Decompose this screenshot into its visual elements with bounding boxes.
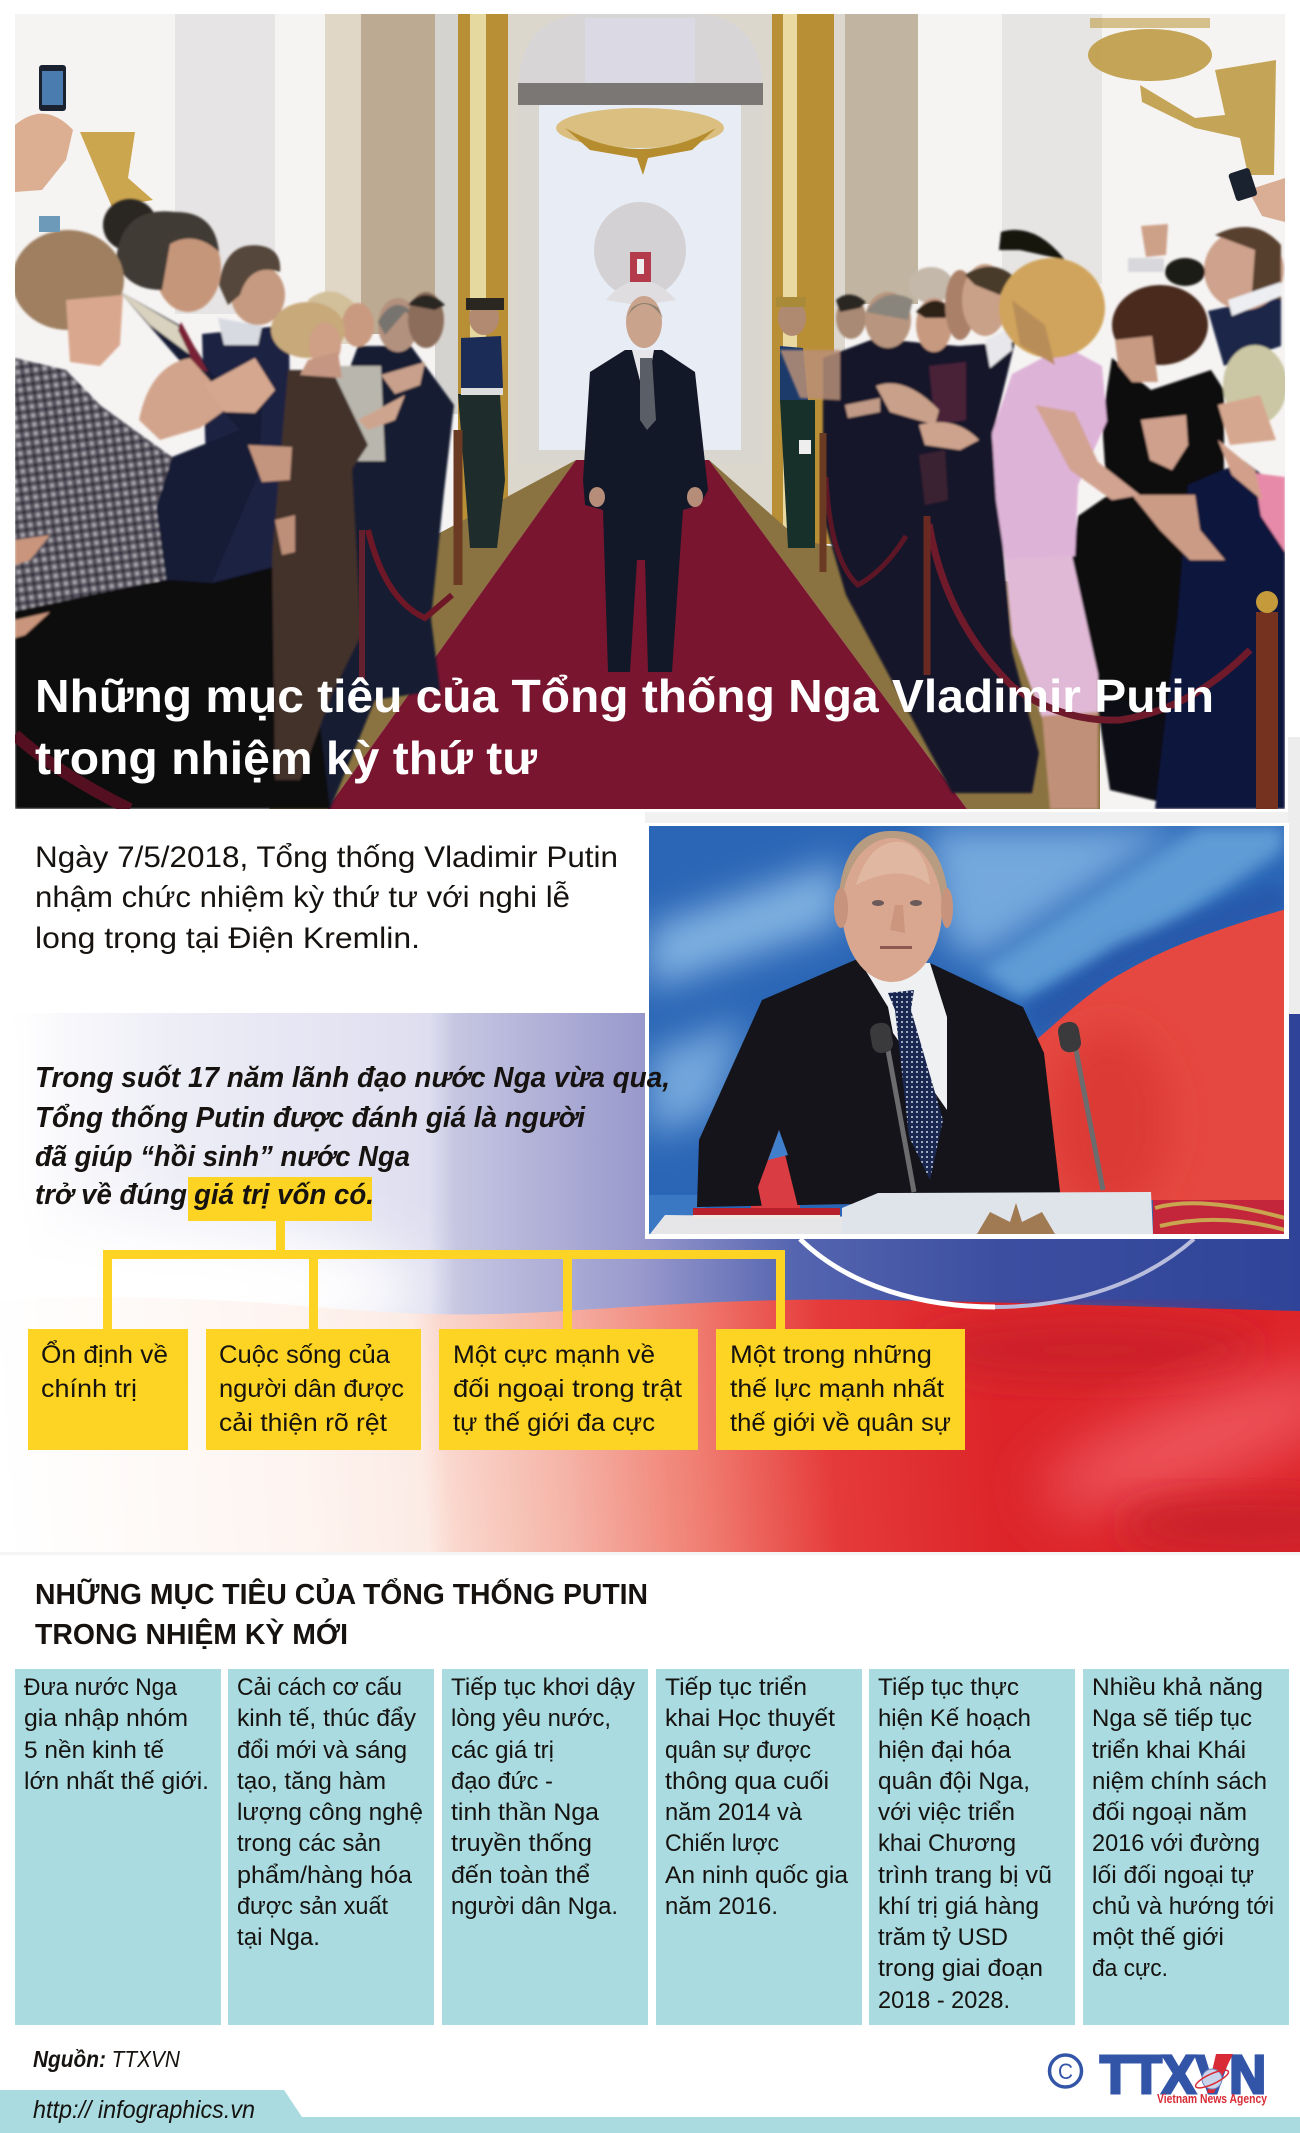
panel: goal 4: năm 2016. — [665, 1893, 778, 1920]
panel: goal 4: Chiến lược — [665, 1830, 779, 1857]
panel: goal 2: trong các sản — [237, 1830, 381, 1857]
intro text — [35, 841, 618, 955]
box: living standards: người dân được — [219, 1375, 404, 1403]
man in suit — [697, 831, 1061, 1207]
panel: goal 5: hiện đại hóa — [878, 1737, 1012, 1764]
decorative arc under portrait — [800, 1239, 1194, 1307]
flag streaks — [645, 826, 1290, 1235]
panel: goal 6: niệm chính sách — [1092, 1768, 1267, 1795]
intro text: long trọng tại Điện Kremlin. — [35, 922, 420, 955]
panel: goal 5: quân đội Nga, — [878, 1768, 1030, 1795]
panel: goal 5: 2018 - 2028. — [878, 1987, 1010, 2014]
box: political stability — [28, 1329, 188, 1450]
panel: goal 6: triển khai Khái — [1092, 1737, 1246, 1764]
phone right with hand — [1228, 167, 1285, 222]
person: guard right — [776, 297, 815, 548]
box: political stability: Ổn định về — [41, 1339, 168, 1369]
quote text: Trong suốt 17 năm lãnh đạo nước Nga vừa qua, — [35, 1062, 670, 1094]
panel: goal 4: thông qua cuối — [665, 1768, 829, 1795]
box: military power — [716, 1329, 965, 1450]
chandelier center — [556, 108, 724, 175]
panel: goal 6: đa cực. — [1092, 1955, 1168, 1982]
tree connector lines — [103, 1221, 785, 1330]
top right chandelier — [1088, 18, 1276, 175]
crowd right — [780, 224, 1287, 809]
panel: goal 1: gia nhập nhóm — [24, 1705, 188, 1732]
panel: goal 1: 5 nền kinh tế — [24, 1737, 165, 1764]
panel: goal 5: khí trị giá hàng — [878, 1893, 1039, 1920]
box: military power: Một trong những — [730, 1341, 932, 1369]
panel: goal 5: Tiếp tục thực — [878, 1674, 1019, 1701]
panel: goal 4: khai Học thuyết — [665, 1705, 835, 1732]
logo: TTXVN: Vietnam News Agency — [1157, 2092, 1267, 2106]
rope and posts right — [823, 433, 1278, 809]
footer band — [0, 2090, 1300, 2133]
panel: goal 4: quân sự được — [665, 1737, 811, 1764]
panel: goal 3: các giá trị — [451, 1737, 554, 1764]
title: trong nhiệm kỳ thứ tư — [35, 732, 538, 784]
box: living standards — [206, 1329, 421, 1450]
panel: goal 4: Tiếp tục triển — [665, 1674, 807, 1701]
quote text — [35, 1062, 670, 1211]
person: guard left — [458, 298, 505, 548]
walls and columns — [175, 14, 1102, 554]
panel: goal 2: Cải cách cơ cấu — [237, 1674, 402, 1701]
title — [35, 670, 1214, 784]
red carpet — [327, 460, 967, 809]
panel: goal 1: lớn nhất thế giới. — [24, 1768, 209, 1795]
logo: TTXVN: C — [1058, 2059, 1073, 2084]
source: Nguồn: TTXVN — [33, 2046, 180, 2072]
panel: goal 2: được sản xuất — [237, 1893, 388, 1920]
box: military power: thế giới về quân sự — [730, 1409, 951, 1437]
crowd left — [12, 199, 454, 809]
panel: goal 5: khai Chương — [878, 1830, 1016, 1857]
panel: goal 5: trăm tỷ USD — [878, 1924, 1008, 1951]
emblem — [594, 202, 686, 304]
panel: goal 2: lượng công nghệ — [237, 1799, 423, 1826]
box: military power: thế lực mạnh nhất — [730, 1375, 944, 1403]
panel: goal 5: trong giai đoạn — [878, 1955, 1043, 1982]
section heading: NHỮNG MỤC TIÊU CỦA TỔNG THỐNG PUTIN — [35, 1577, 648, 1611]
panel: goal 6: 2016 với đường — [1092, 1830, 1260, 1857]
panel: goal 3: đạo đức - — [451, 1768, 553, 1795]
panel: goal 3: người dân Nga. — [451, 1893, 618, 1920]
panel: goal 3: đến toàn thể — [451, 1862, 590, 1889]
panel: goal 3: tinh thần Nga — [451, 1799, 600, 1826]
section heading: TRONG NHIỆM KỲ MỚI — [35, 1617, 348, 1651]
panel: goal 5: hiện Kế hoạch — [878, 1705, 1031, 1732]
panel: goal 4: An ninh quốc gia — [665, 1862, 849, 1889]
box: political stability: chính trị — [41, 1375, 137, 1403]
person: Putin walking — [583, 296, 708, 672]
panel: goal 3 — [442, 1669, 648, 2025]
panel: goal 6: Nhiều khả năng — [1092, 1674, 1263, 1701]
logo: TTXVN: TTXVN — [1100, 2045, 1266, 2105]
box: foreign policy: tự thế giới đa cực — [453, 1409, 655, 1437]
highlight: giá trị vốn có — [188, 1177, 374, 1221]
panel: goal 2 — [228, 1669, 434, 2025]
footer url: http:// infographics.vn — [33, 2096, 255, 2124]
title: Những mục tiêu của Tổng thống Nga Vladimir Putin — [35, 670, 1214, 722]
panel: goal 3: Tiếp tục khơi dậy — [451, 1674, 635, 1701]
panel: goal 2: kinh tế, thúc đẩy — [237, 1705, 416, 1732]
panel: goal 3: lòng yêu nước, — [451, 1705, 611, 1732]
rope left — [15, 430, 458, 809]
left sconce — [80, 132, 153, 207]
panel: goal 6: một thế giới — [1092, 1924, 1224, 1951]
quote text: trở về đúng — [35, 1179, 187, 1211]
intro text: nhậm chức nhiệm kỳ thứ tư với nghi lễ — [35, 881, 570, 914]
box: foreign policy: đối ngoại trong trật — [453, 1375, 682, 1403]
phone left with hand — [15, 65, 73, 232]
floor — [269, 460, 1100, 809]
panel: goal 4 — [656, 1669, 862, 2025]
panel: goal 2: tại Nga. — [237, 1924, 320, 1951]
panel: goal 5: trình trang bị vũ — [878, 1862, 1052, 1889]
panel: goal 6: lối đối ngoại tự — [1092, 1862, 1254, 1889]
panel: goal 2: đổi mới và sáng — [237, 1737, 407, 1764]
doorway — [508, 14, 772, 554]
panel: goal 1: Đưa nước Nga — [24, 1674, 178, 1701]
quote text: Tổng thống Putin được đánh giá là người — [35, 1102, 586, 1134]
photo: Putin at podium — [645, 823, 1290, 1239]
quote text: đã giúp “hồi sinh” nước Nga — [35, 1141, 410, 1173]
box: foreign policy: Một cực mạnh về — [453, 1341, 655, 1369]
panel: goal 6 — [1083, 1669, 1289, 2025]
box: living standards: cải thiện rõ rệt — [219, 1409, 387, 1437]
panel: goal 2: tạo, tăng hàm — [237, 1768, 386, 1795]
podium — [650, 1192, 1285, 1234]
panel: goal 3: truyền thống — [451, 1830, 592, 1857]
microphones — [869, 1020, 1103, 1192]
intro text: Ngày 7/5/2018, Tổng thống Vladimir Putin — [35, 841, 618, 874]
box: foreign policy — [439, 1329, 698, 1450]
panel: goal 1 — [15, 1669, 221, 2025]
section heading — [35, 1577, 648, 1651]
panel: goal 4: năm 2014 và — [665, 1799, 803, 1826]
panel: goal 2: phẩm/hàng hóa — [237, 1862, 413, 1889]
panel: goal 6: chủ và hướng tới — [1092, 1893, 1274, 1920]
panel: goal 6: đối ngoại năm — [1092, 1799, 1247, 1826]
highlight: giá trị vốn có: giá trị vốn có. — [193, 1179, 374, 1211]
panel: goal 6: Nga sẽ tiếp tục — [1092, 1705, 1252, 1732]
box: living standards: Cuộc sống của — [219, 1341, 390, 1369]
panel: goal 5: với việc triển — [878, 1799, 1015, 1826]
photo: inauguration hall — [12, 14, 1287, 809]
panel: goal 5 — [869, 1669, 1075, 2025]
panel: flag background — [0, 737, 1300, 1555]
